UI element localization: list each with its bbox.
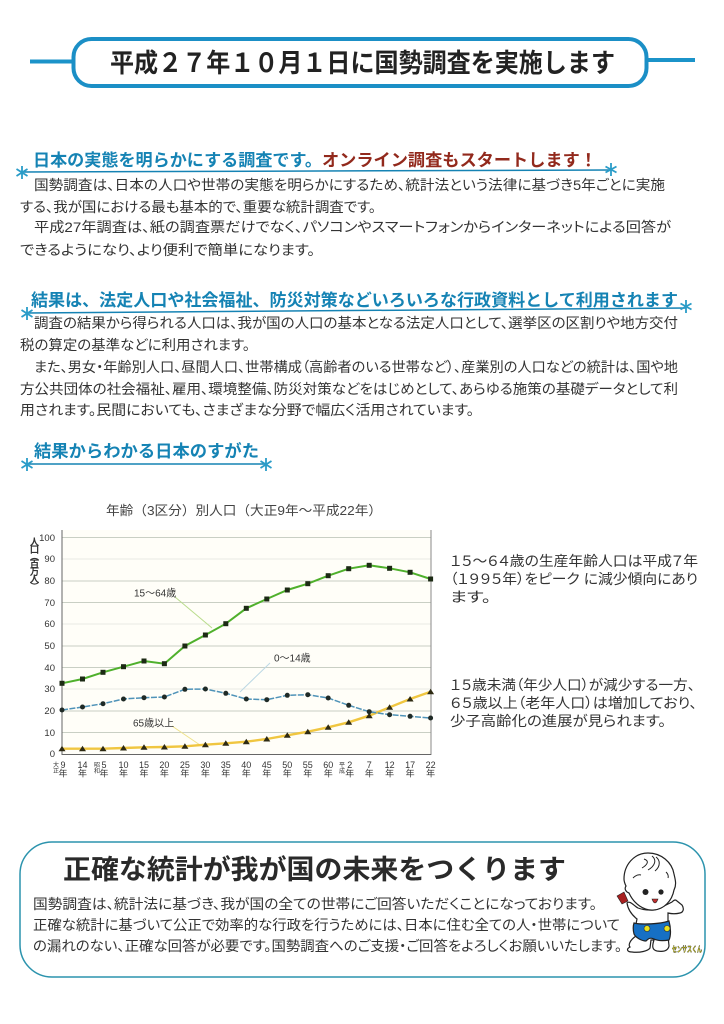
x axis labels: 年 (365, 768, 374, 778)
series 15-64 (60, 563, 433, 686)
section 1 heading (16, 151, 616, 179)
x axis labels: 45 (262, 760, 272, 770)
x axis labels: 60 (323, 760, 333, 770)
section 1 heading: オンライン調査もスタートします！ (322, 151, 597, 170)
x axis labels: 2 (347, 760, 352, 770)
y axis labels: 40 (44, 663, 55, 674)
y axis labels: 10 (44, 728, 55, 739)
commentary: working age population (450, 553, 698, 605)
x axis labels: 40 (241, 760, 251, 770)
series 65+ (58, 689, 434, 751)
x axis labels: 昭 (94, 762, 100, 769)
commentary: working age population: １５～６４歳の生産年齢人口は平成７年 (450, 553, 698, 569)
section 2 text: 税の算定の基準などに利用されます。 (20, 337, 250, 353)
x axis labels: 50 (282, 760, 292, 770)
y axis labels (39, 533, 55, 760)
x axis labels: 平 (339, 762, 345, 769)
title banner: 平成２７年１０月１日に国勢調査を実施します (110, 48, 615, 78)
x axis labels: 15 (139, 760, 149, 770)
section 3 heading: 結果からわかる日本のすがた (34, 441, 259, 461)
x axis labels: 20 (159, 760, 169, 770)
chart title: 年齢（3区分）別人口（大正9年～平成22年） (106, 503, 382, 518)
section 2 text: また、男女・年齢別人口、昼間人口、世帯構成（高齢者のいる世帯など）、産業別の人口などの統計は、国や地 (34, 359, 678, 375)
x axis labels: 年 (160, 768, 169, 778)
x axis labels: 25 (180, 760, 190, 770)
x axis labels (53, 760, 436, 778)
x axis labels: 年 (221, 768, 230, 778)
x axis labels: 年 (303, 768, 312, 778)
x axis labels: 成 (339, 767, 345, 775)
x axis labels: 年 (324, 768, 333, 778)
series labels: 65歳以上 (133, 718, 174, 730)
section 2 text: 調査の結果から得られる人口は、我が国の人口の基本となる法定人口として、選挙区の区割りや地方交付 (34, 315, 678, 331)
section 3 heading (22, 441, 272, 471)
section 1 text: 国勢調査は、日本の人口や世帯の実態を明らかにするため、統計法という法律に基づき5年ごとに実施 (34, 177, 665, 193)
closing text (33, 896, 622, 954)
x axis labels: 年 (58, 768, 68, 778)
x axis labels: 年 (99, 768, 109, 778)
closing text: 国勢調査は、統計法に基づき、我が国の全ての世帯にご回答いただくことになっております。 (33, 896, 597, 912)
x axis labels: 年 (426, 768, 435, 778)
commentary: aging population (450, 677, 697, 729)
commentary: working age population: （１９９５年）をピーク に減少傾向にあり (450, 571, 698, 587)
section 2 text (20, 315, 678, 418)
closing heading: 正確な統計が我が国の未来をつくります (63, 854, 566, 885)
y axis title: 人口（百万人） (28, 537, 39, 591)
closing text: の漏れのない、正確な回答が必要です。国勢調査へのご支援・ご回答をよろしくお願いいたします。 (33, 938, 622, 954)
series labels: 15～64歳 (134, 588, 176, 600)
section 1 text: 平成27年調査は、紙の調査票だけでなく、パソコンやスマートフォンからインターネットによる回答が (34, 219, 671, 235)
x axis labels: 35 (221, 760, 231, 770)
x axis labels: 年 (201, 768, 210, 778)
x axis labels: 10 (118, 760, 129, 770)
leader lines (172, 597, 270, 745)
x axis labels: 7 (367, 760, 372, 770)
y axis labels: 70 (44, 598, 55, 609)
section 2 text: 方公共団体の社会福祉、雇用、環境整備、防災対策などをはじめとして、あらゆる施策の基礎データとして利 (20, 381, 678, 397)
x axis labels: 大 (53, 761, 59, 769)
commentary: working age population: ます。 (450, 589, 491, 605)
y axis labels: 90 (44, 554, 55, 565)
line chart: population by age group (28, 530, 436, 778)
x axis labels: 年 (180, 768, 189, 778)
y axis labels: 80 (44, 576, 55, 587)
panel: closing message (20, 842, 705, 977)
y axis labels: 100 (39, 533, 55, 544)
x axis labels: 年 (78, 768, 87, 778)
y axis labels: 60 (44, 619, 55, 630)
title banner (30, 39, 695, 86)
x axis labels: 年 (283, 768, 292, 778)
section 2 heading: 結果は、法定人口や社会福祉、防災対策などいろいろな行政資料として利用されます (31, 290, 678, 310)
x axis labels: 55 (303, 760, 313, 770)
section 2 text: 用されます。民間においても、さまざまな分野で幅広く活用されています。 (20, 402, 474, 418)
x axis labels: 年 (345, 768, 354, 778)
series 0-14 (60, 686, 433, 720)
x axis labels: 5 (101, 760, 107, 770)
x axis labels: 年 (385, 768, 394, 778)
section 1 text: できるようになり、より便利で簡単になります。 (20, 242, 315, 258)
y axis labels: 30 (44, 684, 55, 695)
x axis labels: 年 (139, 768, 149, 778)
x axis labels: 17 (405, 760, 415, 770)
section 1 heading: 日本の実態を明らかにする調査です。 (33, 151, 322, 170)
x axis labels: 14 (77, 760, 88, 770)
x axis labels: 30 (200, 760, 210, 770)
x axis labels: 年 (262, 768, 271, 778)
section 1 text (20, 177, 671, 258)
y axis labels: 0 (50, 749, 55, 760)
x axis labels: 正 (53, 768, 59, 775)
section 2 heading (22, 290, 692, 320)
y axis labels: 50 (44, 641, 55, 652)
commentary: aging population: 少子高齢化の進展が見られます。 (450, 713, 666, 729)
x axis labels: 12 (385, 760, 395, 770)
series labels (133, 588, 311, 730)
y axis labels: 20 (44, 706, 55, 717)
closing text: 正確な統計に基づいて公正で効率的な行政を行うためには、日本に住む全ての人・世帯について (33, 917, 620, 933)
commentary: aging population: １５歳未満（年少人口）が減少する一方、 (450, 677, 695, 693)
x axis labels: 年 (406, 768, 415, 778)
x axis labels: 22 (426, 760, 436, 770)
x axis labels: 9 (60, 760, 66, 770)
series labels: 0～14歳 (274, 652, 311, 664)
icon: census baby mascot: センサスくん (672, 945, 702, 954)
x axis labels: 和 (94, 767, 100, 775)
icon: census baby mascot (617, 853, 702, 954)
commentary: aging population: ６５歳以上（老年人口）は増加しており、 (450, 695, 697, 711)
x axis labels: 年 (242, 768, 251, 778)
x axis labels: 年 (119, 768, 128, 778)
section 1 text: する、我が国における最も基本的で、重要な統計調査です。 (20, 199, 376, 215)
